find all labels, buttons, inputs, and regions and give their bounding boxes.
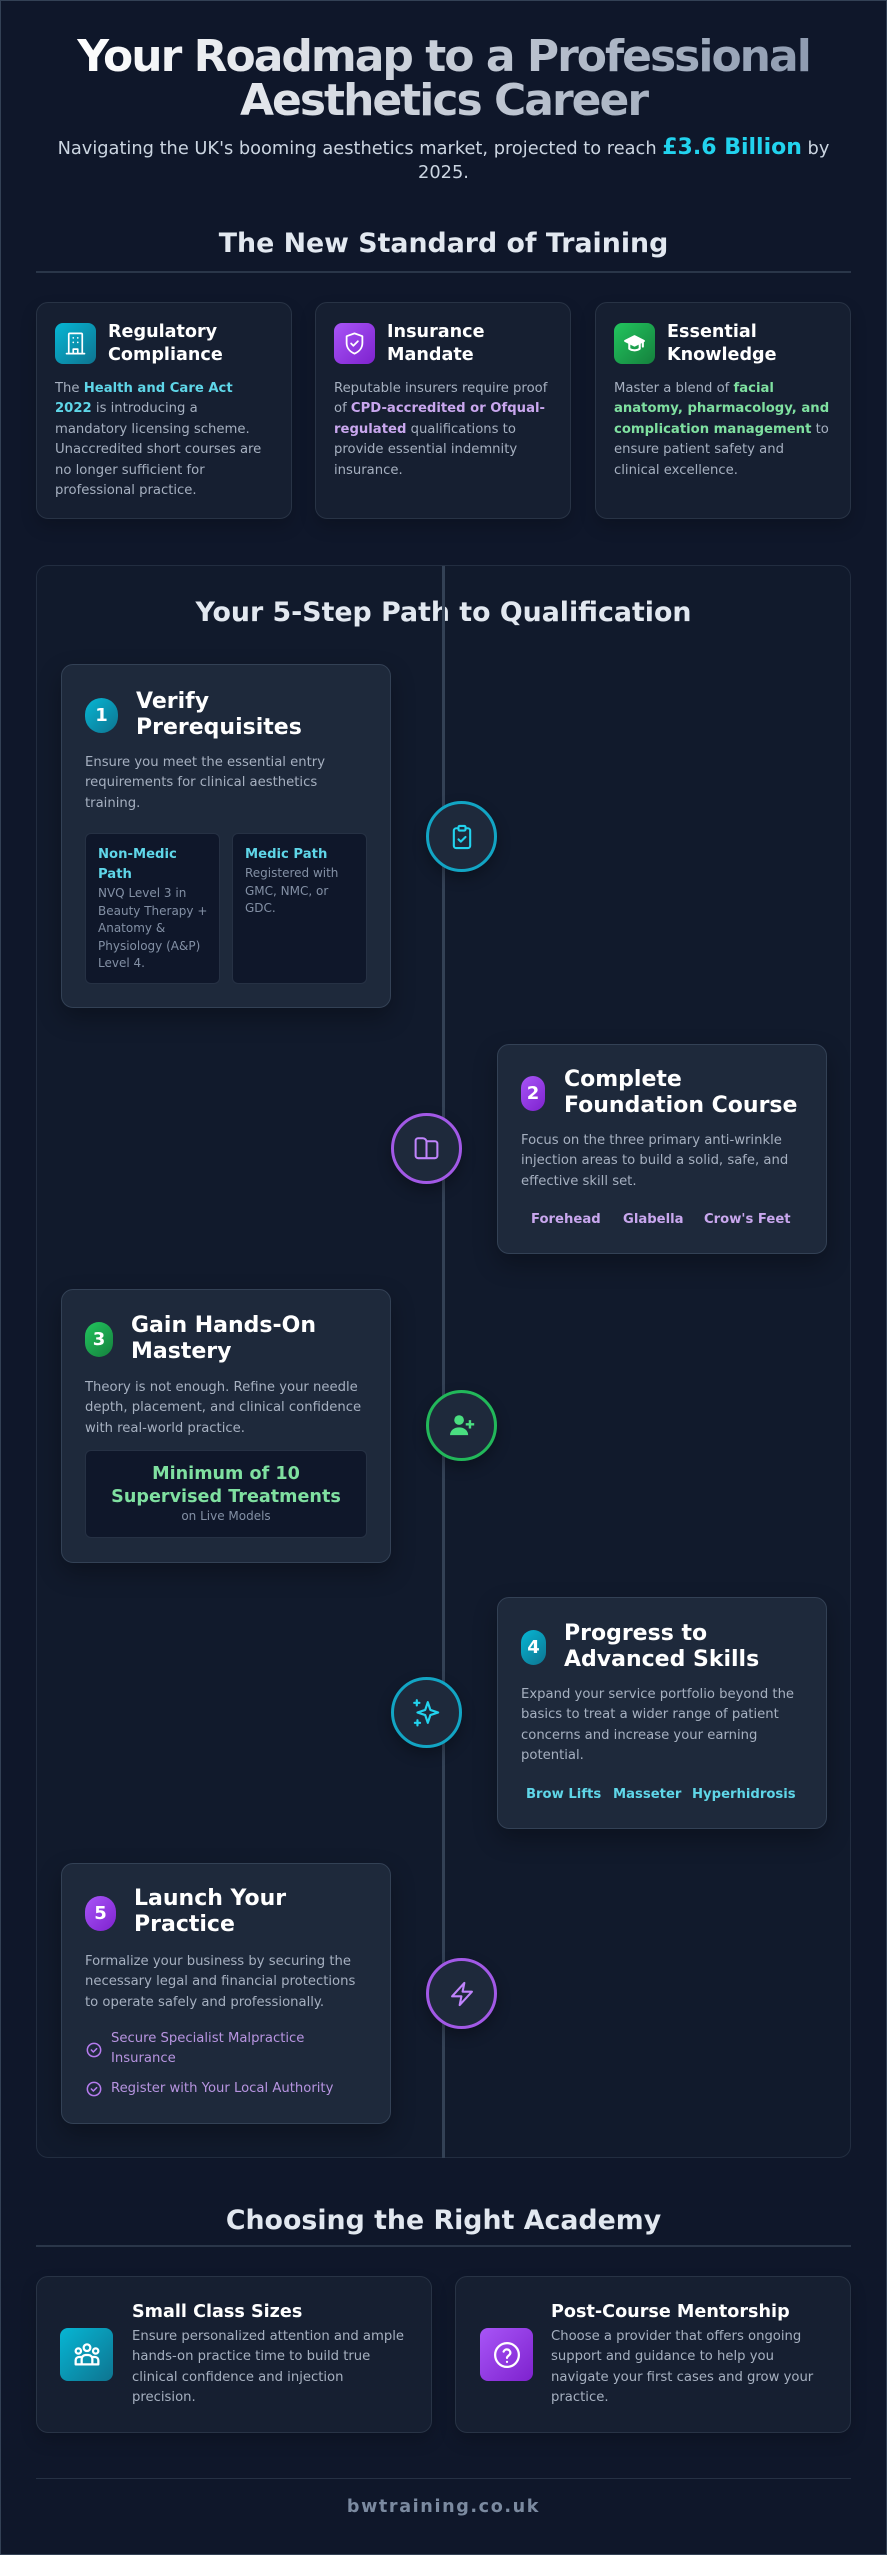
step text: Theory is not enough. Refine your needle [85,1380,358,1395]
check list [111,2031,304,2066]
card text: of CPD-accredited or Ofqual- [334,401,545,416]
step 1 icon: clipboard check [426,801,497,872]
card title: Post-Course Mentorship [551,2302,790,2322]
card text [551,2329,814,2405]
step title [134,1886,286,1937]
card text: hands-on practice time to build true [132,2349,370,2364]
step text: necessary legal and financial protections [85,1974,355,1989]
title: Your Roadmap to a Professional [77,31,810,82]
heading: the new standard of training: The New Standard of Training [219,228,668,259]
non-medic path: Beauty Therapy + [98,904,207,918]
step text [521,1133,788,1189]
non-medic path: Level 4. [98,956,145,970]
step text: to operate safely and professionally. [85,1995,324,2010]
card title [387,322,485,365]
step 2 card: Glabella [623,1212,684,1227]
step title: Mastery [131,1339,231,1364]
step text: Ensure you meet the essential entry [85,755,325,770]
title [1,35,886,123]
step number: 1 [95,705,108,726]
step title: Complete [564,1067,682,1092]
card text [334,381,548,478]
medic path: GMC, NMC, or [245,884,328,898]
step number [521,1076,545,1111]
step text: effective skill set. [521,1174,637,1189]
step title: Practice [134,1912,235,1937]
card title: Essential [667,322,757,342]
non-medic path [85,833,220,984]
subtitle [58,135,829,183]
card text [54,381,261,498]
step number: 3 [93,1329,105,1350]
card text: no longer sufficient for [55,463,205,478]
card text: Choose a provider that offers ongoing [551,2329,801,2344]
callout: minimum treatments: Supervised Treatments [111,1487,341,1507]
step 2 card [497,1044,827,1254]
panel: essential knowledge [595,302,851,519]
step 3 icon: user plus [426,1390,497,1461]
card text: regulated qualifications to [334,422,516,437]
step text: potential. [521,1748,584,1763]
card text: Ensure personalized attention and ample [132,2329,404,2344]
card text: The Health and Care Act [55,381,233,396]
step number: 5 [94,1903,107,1924]
card text: navigate your first cases and grow your [551,2370,813,2385]
step title: Foundation Course [564,1093,797,1118]
panel: 5-step path [36,565,851,2158]
step title [564,1067,797,1118]
step text: with real-world practice. [85,1421,245,1436]
card text: insurance. [334,463,403,478]
non-medic path: Anatomy & [98,921,165,935]
step text: requirements for clinical aesthetics [85,775,317,790]
card text: clinical confidence and injection [132,2370,343,2385]
card text: provide essential indemnity [334,442,517,457]
step number [85,1896,116,1931]
step 1 card [61,664,391,1008]
card text: precision. [132,2390,196,2405]
medic path: GDC. [245,901,276,915]
panel: regulatory compliance [36,302,292,519]
card text: anatomy, pharmacology, and [614,401,829,416]
medic path [232,833,367,984]
callout: minimum treatments: on Live Models [181,1509,271,1523]
card title: Compliance [108,345,223,365]
check list: Secure Specialist Malpractice [111,2031,304,2046]
step 4 icon: sparkles [391,1677,462,1748]
step title: Progress to [564,1621,707,1646]
icon: check [86,2042,102,2058]
step text: Expand your service portfolio beyond the [521,1687,794,1702]
panel: small class sizes [36,2276,432,2433]
step 5 card [61,1863,391,2124]
step text [521,1687,794,1763]
timeline line [442,566,445,2158]
callout: minimum treatments: Minimum of 10 [152,1464,300,1484]
step 4 card: Masseter [613,1787,681,1802]
step 4 card: Hyperhidrosis [692,1787,796,1802]
card title: Insurance [387,322,485,342]
card text: ensure patient safety and [614,442,784,457]
step title: Advanced Skills [564,1647,759,1672]
step title: Prerequisites [136,715,302,740]
step text: depth, placement, and clinical confidence [85,1400,361,1415]
icon: users [60,2328,113,2381]
step title [564,1621,759,1672]
card text: 2022 is introducing a [55,401,198,416]
non-medic path: Non-Medic [98,847,177,862]
step 5 icon: lightning [426,1958,497,2029]
card title [108,322,223,365]
step 3 card [61,1289,391,1563]
step text: Formalize your business by securing the [85,1954,351,1969]
step title [131,1313,316,1364]
step 2 card: Crow's Feet [704,1212,791,1227]
chips: Forehead [531,1212,601,1227]
card title [667,322,777,365]
step text: concerns and increase your earning [521,1728,757,1743]
heading: choosing the right academy: Choosing the Right Academy [226,2205,661,2236]
step text [84,1380,361,1436]
icon: question [480,2328,533,2381]
subtitle: Navigating the UK's booming aesthetics market, projected to reach £3.6 Billion by [58,135,829,160]
footer: bwtraining.co.uk [347,2497,540,2517]
list item: Register with Your Local Authority [111,2081,333,2096]
title: Aesthetics Career [240,75,647,126]
step text: Focus on the three primary anti-wrinkle [521,1133,782,1148]
chips: Brow Lifts [526,1787,601,1802]
non-medic path: Physiology (A&P) [98,938,200,952]
card text: mandatory licensing scheme. [55,422,250,437]
card text: Unaccredited short courses are [55,442,261,457]
medic path: Medic Path [245,847,327,862]
subtitle: 2025. [418,162,469,183]
icon: shield [334,323,375,364]
icon: building [55,323,96,364]
step title: Verify [136,689,209,714]
step title: Launch Your [134,1886,286,1911]
panel: insurance mandate [315,302,571,519]
step title: Gain Hands-On [131,1313,316,1338]
step text: basics to treat a wider range of patient [521,1707,779,1722]
step 4 card [497,1597,827,1829]
card text: practice. [551,2390,609,2405]
card text: professional practice. [55,483,197,498]
medic path: Registered with [245,866,338,880]
check list: Insurance [111,2051,176,2066]
step 2 icon: book [391,1113,462,1184]
card text: clinical excellence. [614,463,738,478]
card text: Master a blend of facial [614,381,774,396]
non-medic path: NVQ Level 3 in [98,886,186,900]
callout: minimum treatments [85,1450,367,1538]
card text [132,2329,404,2405]
step text: training. [85,796,140,811]
card title: Mandate [387,345,474,365]
non-medic path: Path [98,867,132,882]
step number [521,1630,546,1665]
card text: Reputable insurers require proof [334,381,547,396]
icon: graduation cap [614,323,655,364]
step text: injection areas to build a solid, safe, and [521,1153,788,1168]
card title: Regulatory [108,322,217,342]
step title [136,689,302,740]
card text: support and guidance to help you [551,2349,774,2364]
icon: check [86,2082,102,2096]
step number [85,1322,113,1357]
card title: Small Class Sizes [132,2302,302,2322]
step number: 4 [527,1637,540,1658]
card title: Knowledge [667,345,777,365]
card text [614,381,829,478]
step text [85,755,325,811]
step number [85,698,118,733]
card text: complication management to [614,422,829,437]
panel: post-course mentorship [455,2276,851,2433]
step text [85,1954,355,2010]
heading: 5-step path: Your 5-Step Path to Qualification [196,597,691,628]
step number: 2 [527,1083,539,1104]
